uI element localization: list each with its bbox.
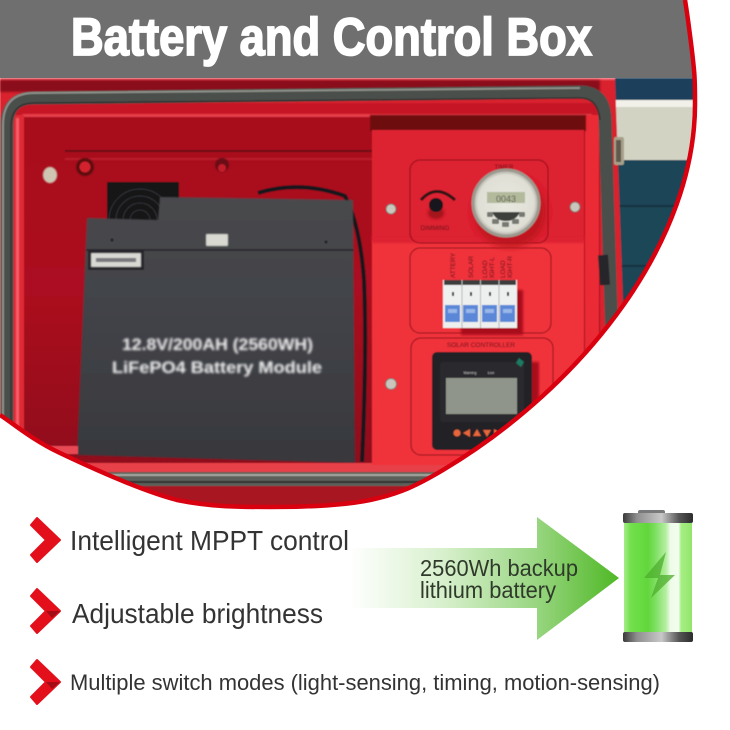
solar controller: [432, 342, 539, 450]
icon: battery: [623, 510, 693, 642]
solar controller: SOLAR CONTROLLER: [447, 342, 515, 349]
inner lips: [8, 103, 599, 470]
panel screws: [386, 202, 580, 390]
chevron bullet 3: [31, 660, 60, 704]
battery module printed text: 12.8V/200AH (2560WH): [122, 335, 313, 354]
battery module: [77, 197, 355, 463]
feature text: switch modes: Multiple switch modes (light-sensing, timing, motion-sensing): [70, 670, 660, 695]
green arrow: [350, 517, 619, 640]
timer dial: [473, 165, 546, 248]
title: Battery and Control Box: [71, 8, 592, 67]
cooling fan: [106, 182, 180, 221]
box outer rim: [0, 79, 624, 415]
battery module printed text: [112, 335, 322, 377]
breaker labels: SOLAR: [468, 256, 475, 278]
black wire: [258, 187, 365, 462]
background behind box: [614, 78, 693, 302]
mounting rod and bolts: [43, 150, 372, 183]
photo: open battery and control box: [0, 0, 730, 516]
solar controller: Lion: [488, 371, 494, 375]
label plates: [88, 234, 228, 270]
arrow text: lithium battery: [420, 577, 556, 603]
grey title band: [0, 0, 730, 78]
control panel: [372, 130, 584, 465]
breaker labels: LOAD: [482, 260, 489, 278]
arrow text: 2560Wh backup: [420, 555, 578, 581]
chevron bullet 2: [31, 589, 60, 633]
circuit breakers: [443, 252, 523, 335]
timer dial: TIMER: [495, 165, 514, 171]
icon: lightning bolt: [644, 552, 675, 598]
section outlines: [410, 160, 553, 455]
bottom lip of the box: [50, 445, 448, 505]
breaker labels: IGHT-L: [489, 257, 496, 278]
latch on the right: [614, 137, 624, 165]
feature text: brightness: Adjustable brightness: [72, 598, 323, 629]
solar controller: Warning: [464, 371, 477, 375]
box interior back wall: [14, 104, 600, 474]
battery module printed text: LiFePO4 Battery Module: [112, 358, 322, 377]
breaker labels: LOAD: [500, 260, 507, 278]
feature text: MPPT control: Intelligent MPPT control: [70, 525, 349, 556]
shadow above control panel: [370, 115, 586, 131]
red curved border: [0, 0, 695, 507]
timer dial: 0043: [496, 194, 516, 204]
breaker labels: IGHT-R: [507, 256, 514, 278]
dimming knob: [421, 192, 455, 232]
rubber gasket: [0, 84, 618, 422]
breaker labels: [450, 252, 514, 278]
arrow text: [420, 555, 578, 603]
breaker labels: ATTERY: [450, 252, 457, 278]
chevron bullet 1: [31, 518, 60, 562]
dimming knob: DIMMING: [421, 225, 449, 232]
